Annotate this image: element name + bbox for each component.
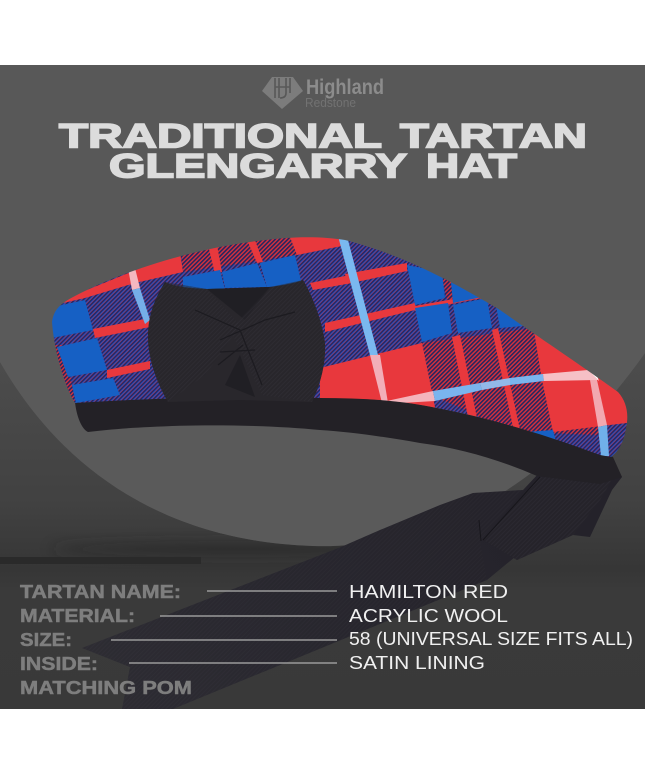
- title: TRADITIONAL: [59, 118, 382, 156]
- spec values: [349, 581, 633, 673]
- title: TARTAN: [400, 118, 587, 156]
- tartan: white and light blue stripes: [128, 270, 140, 290]
- ribbon tails: [82, 463, 622, 709]
- tartan: blue blocks: [48, 255, 557, 445]
- tartan: red-navy hatched areas: [50, 232, 600, 440]
- spec values: 58 (UNIVERSAL SIZE FITS ALL): [349, 628, 633, 649]
- leader lines: [111, 591, 337, 663]
- logo: Highland Redstone: Highland: [306, 76, 384, 99]
- hat: tartan crown: [52, 237, 628, 457]
- spec values: ACRYLIC WOOL: [349, 605, 508, 626]
- logo: Highland Redstone: Redstone: [305, 96, 356, 110]
- title: GLENGARRY: [109, 148, 407, 186]
- tartan: red blocks: [50, 232, 635, 432]
- title: HAT: [426, 148, 517, 186]
- logo: Highland Redstone: [262, 76, 384, 110]
- divider bar: [0, 557, 201, 564]
- spec labels: TARTAN NAME:: [20, 581, 181, 602]
- bow: [148, 280, 325, 402]
- spec labels: SIZE:: [20, 629, 72, 650]
- spec values: HAMILTON RED: [349, 581, 508, 602]
- spec labels: MATERIAL:: [20, 605, 135, 626]
- spec labels: [20, 581, 192, 698]
- title: [59, 118, 587, 186]
- spec labels: INSIDE:: [20, 653, 98, 674]
- hat band: [75, 397, 622, 484]
- spec labels: MATCHING POM: [20, 677, 192, 698]
- spec values: SATIN LINING: [349, 652, 485, 673]
